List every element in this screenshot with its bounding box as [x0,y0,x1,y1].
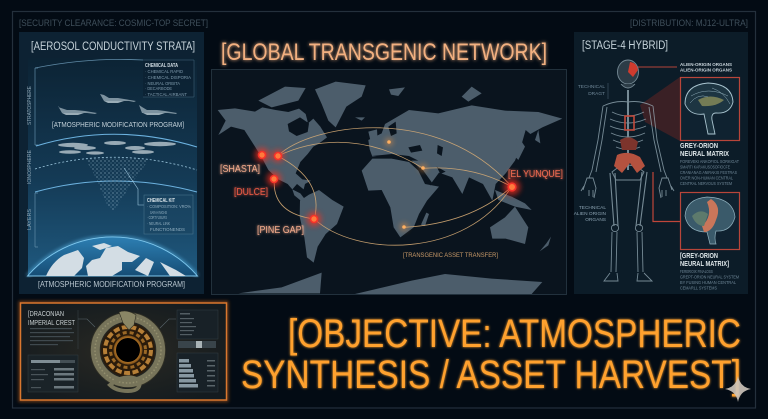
particle funnel [85,158,150,212]
chemical data box: · CHEMICAL RAPID [145,69,183,75]
panel heading: [STAGE-4 HYBRID] [582,40,668,52]
chemical kit box: SARAH NIGHS [150,210,167,216]
grey-orion text one: CRANIANAG ANIRAKIS FESTRAS [680,170,737,175]
crest heading [28,309,75,327]
chemical kit box: · NEURAL LINK [147,221,171,227]
chemical data box [143,60,194,98]
location labels: [SHASTA] [220,164,260,175]
program caption lower: [ATMOSPHERIC MODIFICATION PROGRAM] [38,280,185,289]
chemical data box: · NEURAL ORBITA [145,81,181,87]
chemical kit box [144,195,193,234]
crest left readouts [28,310,78,392]
grey-orion text two: BY FUSING HUMAN CENTRAL [680,280,736,285]
brain box two [680,192,740,250]
chemical data box: · CHEMICAL DISPORIA [145,75,192,81]
grey-orion text two: FERERIOIX FINALOSS [680,269,713,274]
chemical data box: · TACTICAL AIRBANT [145,92,187,98]
panel: aerosol conductivity strata: LAYERS [27,209,33,230]
panel heading: [AEROSOL CONDUCTIVITY STRATA] [31,41,195,53]
earth globe [28,237,198,276]
chemical kit box: · COMPOSITION: VRO% [147,204,192,210]
grey-orion text two: [GREY-ORION [680,253,718,260]
red organs [614,62,645,173]
chemical kit box: · CORTYUSURS [147,215,167,221]
alien origin caption: ALIEN-ORIGIN ORGANS [680,62,733,68]
objective banner [241,312,741,397]
route caption: [TRANSGENIC ASSET TRANSFER] [403,253,498,259]
crest right readouts [177,310,218,392]
panel: aerosol conductivity strata: IONOSPHERE [27,150,33,184]
crest heading: IMPERIAL CREST [28,318,75,327]
technical alien origin label: TECHNICAL [579,205,606,211]
program caption upper: [ATMOSPHERIC MODIFICATION PROGRAM] [52,120,184,129]
network nodes [255,138,520,230]
clouds [58,141,176,155]
strata arcs and brackets [35,59,197,247]
location labels: [DULCE] [234,187,268,198]
location labels [220,164,563,236]
technical drag label: DRAGT [588,91,605,97]
organ callout lines [638,66,677,68]
ouroboros emblem [90,311,166,391]
header: security clearance: [SECURITY CLEARANCE: COSMIC-TOP SECRET] [19,18,208,28]
chemical data box: CHEMICAL DATA [145,63,178,69]
panel: draconian imperial crest [20,303,226,400]
side labels: STRATOSPHERE [27,86,33,125]
alien origin caption [680,62,733,74]
transfer routes [274,128,512,245]
grey-orion text one: OVER NON-HUMAN CENTRAL [680,176,733,180]
grey-orion text two: GREPT-ORION NEURAL SYSTEM [680,274,739,280]
crest connector lines [78,319,176,328]
grey-orion text one: NEURAL MATRIX [680,151,729,158]
grey-orion text one: CENTRAL NERVOUS SYSTEM [680,181,732,186]
technical drag label [578,84,605,97]
skeleton figure [581,60,674,281]
panel: world map [212,70,566,294]
chemical kit box: FUNCTIONENDS [150,227,185,233]
grey-orion text one: FOREVEKI ANKOFIOL SORKIGAT [680,159,739,164]
technical alien origin label: ALIEN ORIGIN [574,211,607,217]
crest heading: [DRACONIAN [28,309,64,318]
grey-orion text one [680,143,739,186]
panel: stage-4 hybrid [574,32,748,294]
icon: sparkle [725,376,751,402]
technical drag label: TECHNICAL [578,84,605,90]
grey-orion text one: SMARTI KARAKUSOSOFIOCFE [680,164,730,170]
panel: aerosol conductivity strata [19,32,204,294]
alien origin caption: ALIEN-ORIGIN ORGANS [680,68,733,74]
location labels: [PINE GAP] [257,225,304,236]
callout wedge [640,77,680,141]
land masses [218,82,562,294]
grey-orion text two [680,253,739,290]
chemical data box: · DECARBODE [145,86,172,92]
chemical kit box: CHEMICAL KIT [147,198,175,204]
location labels: [EL YUNQUE] [508,169,563,180]
technical alien origin label [574,205,607,223]
jet aircraft [58,94,177,115]
technical alien origin label: ORGANS [585,217,606,223]
grey-orion text two: CEMARLL SYSTEMS [680,286,717,290]
grey-orion text two: NEURAL MATRIX] [680,261,729,268]
heading: global transgenic network: [GLOBAL TRANSGENIC NETWORK] [221,39,547,66]
grey-orion text one: GREY-ORION [680,143,718,150]
brain box one [680,78,740,140]
header: distribution: [DISTRIBUTION: MJ12-ULTRA] [630,18,748,28]
